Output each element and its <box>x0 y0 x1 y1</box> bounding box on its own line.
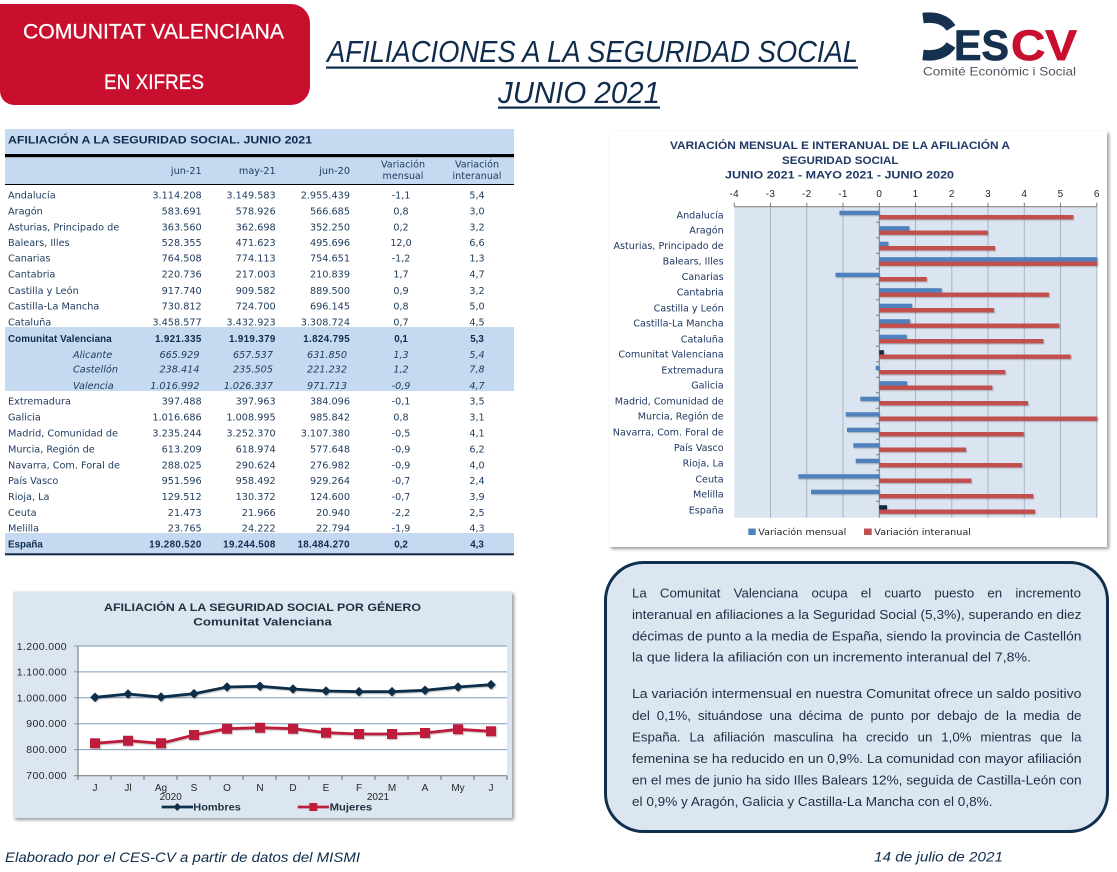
table column headers: interanual <box>453 171 501 182</box>
bar chart category labels: País Vasco <box>674 442 724 454</box>
row: Asturias: 363.560 <box>162 222 202 233</box>
panel: line chart by gender <box>13 592 512 818</box>
row: Murcia <box>8 444 485 456</box>
row: España: España <box>8 540 43 551</box>
paragraph 1: la que lidera la afiliación con un incremento interanual del 7,8%. <box>632 651 1031 665</box>
row: Canarias: 764.508 <box>162 254 202 265</box>
line chart y axis labels: 900.000 <box>26 718 67 730</box>
row: Aragón <box>8 205 485 217</box>
line chart legend: Mujeres <box>330 802 373 814</box>
row: Murcia: 613.209 <box>162 445 202 456</box>
row: Madrid: 4,1 <box>469 429 485 440</box>
bar chart top axis labels: 0 <box>876 189 882 200</box>
bar chart category labels: Extremadura <box>661 366 724 376</box>
row: Melilla: 23.765 <box>168 524 202 535</box>
bar chart category labels: Cantabria <box>677 288 724 298</box>
row: Cantabria: 4,7 <box>469 270 485 281</box>
bar chart category labels: Ceuta <box>695 474 724 486</box>
row: Cataluña: 0,7 <box>393 317 409 328</box>
bar chart top axis labels: -2 <box>802 189 812 200</box>
panel: data table <box>5 129 514 555</box>
row: Valencia: -0,9 <box>392 381 410 392</box>
row: Castellón: Castellón <box>73 364 118 376</box>
row: Alicante: 665.929 <box>159 350 200 361</box>
row: Castellón: 221.232 <box>307 365 347 376</box>
bar chart category labels: Asturias, Principado de <box>613 241 724 252</box>
row: Asturias: 362.698 <box>236 222 276 233</box>
paragraph 2 <box>632 687 1082 809</box>
row: Alicante: Alicante <box>72 350 112 361</box>
line chart title: AFILIACIÓN A LA SEGURIDAD SOCIAL POR GÉNERO <box>104 601 421 614</box>
footer: date: 14 de julio de 2021 <box>874 848 1003 864</box>
row: Alicante: 1,3 <box>393 350 409 361</box>
row: Murcia: 577.648 <box>310 445 350 456</box>
row: País Vasco: País Vasco <box>8 475 58 487</box>
logo: CESCV: ES <box>954 22 1009 70</box>
line chart x axis labels: Ag <box>155 783 167 794</box>
line chart x axis labels: S <box>191 783 198 794</box>
row: Aragón: 566.685 <box>310 206 350 217</box>
row: Rioja: 124.600 <box>310 492 350 503</box>
row: Castellón <box>73 364 485 376</box>
row: Melilla: -1,9 <box>392 524 410 535</box>
row: Rioja <box>8 492 485 503</box>
row: Asturias <box>8 222 485 233</box>
row: Asturias: 3,2 <box>469 222 485 233</box>
row: Comunitat Valenciana: Comunitat Valenciana <box>8 334 112 345</box>
table column headers: Variación <box>381 158 425 170</box>
row: País Vasco: 2,4 <box>469 476 485 487</box>
line chart x axis labels: J <box>488 783 494 794</box>
row: Castilla y León: 889.500 <box>310 286 350 297</box>
bar chart top axis labels: -4 <box>730 189 739 200</box>
table column headers: mensual <box>383 171 423 182</box>
row: Cantabria: 217.003 <box>236 270 276 281</box>
row: País Vasco: 929.264 <box>310 476 350 487</box>
row: Castilla-La Mancha <box>8 302 485 312</box>
row: Canarias: 774.113 <box>236 254 276 265</box>
line chart y axis labels: 800.000 <box>26 744 67 756</box>
row: Murcia: -0,9 <box>392 445 410 456</box>
row: Madrid: 3.252.370 <box>226 429 276 440</box>
title: JUNIO 2021 <box>497 75 660 110</box>
row: Andalucía: 5,4 <box>469 191 485 202</box>
row: Valencia: Valencia <box>73 381 114 392</box>
row: Alicante: 631.850 <box>307 350 347 361</box>
row: Andalucía: 3.114.208 <box>152 191 202 202</box>
row: País Vasco: -0,7 <box>392 476 410 487</box>
row: Ceuta: 21.966 <box>242 508 276 519</box>
row: Castilla-La Mancha: 730.812 <box>162 302 202 312</box>
row: Rioja: 129.512 <box>162 492 202 503</box>
row: Extremadura <box>8 397 485 408</box>
line chart x axis labels: F <box>356 783 362 794</box>
row: Melilla: Melilla <box>8 524 39 535</box>
line chart y axis labels: 700.000 <box>26 770 67 782</box>
row: Canarias <box>8 254 485 265</box>
row: Comunitat Valenciana: 1.921.335 <box>155 334 202 345</box>
paragraph 2: La variación intermensual en nuestra Comunitat ofrece un saldo positivo <box>632 687 1082 701</box>
bar chart category labels: España <box>689 506 724 516</box>
bar chart category labels: Madrid, Comunidad de <box>615 396 724 408</box>
bar chart category labels: Castilla y León <box>654 302 724 314</box>
row: Valencia <box>73 381 486 392</box>
bar chart legend: Variación mensual <box>758 527 846 538</box>
paragraph 2: España. La afiliación masculina ha crecido un 1,0% mientras que la <box>632 731 1082 745</box>
row: Ceuta: 21.473 <box>168 508 202 519</box>
line chart x axis labels: J <box>92 783 98 794</box>
row: País Vasco: 951.596 <box>162 476 202 487</box>
row: Castilla-La Mancha: 724.700 <box>236 302 276 312</box>
series: variación interanual bars <box>879 215 1097 514</box>
header badge: Comunitat Valenciana en xifres: COMUNITAT VALENCIANA <box>23 20 284 44</box>
line chart x axis labels: My <box>451 783 465 794</box>
row: Navarra: Navarra, Com. Foral de <box>8 461 120 472</box>
row: Rioja: 130.372 <box>236 492 276 503</box>
bar chart top axis labels: -3 <box>766 189 775 200</box>
bar chart category labels: Galicia <box>691 380 724 392</box>
row: Castilla-La Mancha: 5,0 <box>469 302 485 312</box>
line chart x axis labels: M <box>388 783 396 794</box>
bar chart title: VARIACIÓN MENSUAL E INTERANUAL DE LA AFILIACIÓN A <box>670 139 1010 152</box>
row: Extremadura: 397.963 <box>236 397 276 408</box>
line chart y axis labels: 1.000.000 <box>17 693 67 705</box>
bar chart title: SEGURIDAD SOCIAL <box>782 155 899 167</box>
row: Galicia: 3,1 <box>469 413 485 424</box>
row: Extremadura: -0,1 <box>392 397 410 408</box>
row: Galicia: 1.016.686 <box>152 413 202 424</box>
row: Rioja: 3,9 <box>469 492 485 503</box>
row: Navarra: -0,9 <box>392 461 410 472</box>
row: Alicante <box>72 350 485 361</box>
row: Balears: Balears, Illes <box>8 238 70 249</box>
paragraph 1: décimas de punto a la media de España, siendo la provincia de Castellón <box>632 630 1082 644</box>
row: Galicia: Galicia <box>8 413 41 424</box>
bar chart category labels: Navarra, Com. Foral de <box>613 428 724 438</box>
row: Canarias: 754.651 <box>310 254 350 265</box>
row: Murcia: 618.974 <box>236 445 276 456</box>
line chart title <box>104 601 421 628</box>
row: Castilla-La Mancha: 0,8 <box>393 302 409 312</box>
row: Madrid: 3.107.380 <box>301 429 350 440</box>
row: Comunitat Valenciana: 5,3 <box>470 334 484 345</box>
row: Galicia <box>8 413 485 424</box>
footer: source: Elaborado por el CES-CV a partir de datos del MISMI <box>5 849 360 865</box>
row: Alicante: 657.537 <box>233 350 274 361</box>
row: Cataluña: 3.308.724 <box>301 317 350 328</box>
row: Castilla-La Mancha: 696.145 <box>310 302 350 312</box>
row: Madrid <box>8 429 485 440</box>
row: Canarias: -1,2 <box>392 254 410 265</box>
bar chart top axis labels: 5 <box>1058 189 1064 200</box>
line chart title: Comunitat Valenciana <box>193 616 333 628</box>
row: Extremadura: 3,5 <box>469 397 485 408</box>
row: Galicia: 985.842 <box>310 413 350 424</box>
line chart legend: Hombres <box>193 802 241 814</box>
row: Ceuta: Ceuta <box>8 508 37 519</box>
row: País Vasco: 958.492 <box>236 476 276 487</box>
paragraph 1: interanual en afiliaciones a la Seguridad Social (5,3%), superando en diez <box>632 608 1082 622</box>
row: Galicia: 1.008.995 <box>226 413 276 424</box>
bar chart top axis labels: 6 <box>1094 189 1100 200</box>
line chart x axis labels: 2021 <box>367 792 390 803</box>
row: Melilla: 22.794 <box>316 524 350 535</box>
bar chart top axis labels: 3 <box>985 189 991 200</box>
paragraph 1: La Comunitat Valenciana ocupa el cuarto puesto en incremento <box>632 586 1081 600</box>
row: Cataluña: 3.432.923 <box>226 317 276 328</box>
row: Valencia: 1.026.337 <box>224 381 274 392</box>
bar chart category labels <box>613 210 724 516</box>
row: Aragón: 0,8 <box>393 206 409 217</box>
row: Melilla: 24.222 <box>242 524 276 535</box>
row: Madrid: 3.235.244 <box>152 429 202 440</box>
table column headers: may-21 <box>239 166 276 177</box>
row: Ceuta: 2,5 <box>469 508 485 519</box>
row: Castellón: 7,8 <box>469 365 485 376</box>
row: Navarra: 276.982 <box>310 461 350 472</box>
row: Extremadura: 384.096 <box>310 397 350 408</box>
row: Aragón: 3,0 <box>469 206 485 217</box>
series: Mujeres line <box>90 723 496 748</box>
row: Cataluña: 4,5 <box>469 317 485 328</box>
line chart x axis labels: A <box>422 783 429 794</box>
header badge: Comunitat Valenciana en xifres: EN XIFRES <box>104 71 204 94</box>
bar chart category labels: Aragón <box>689 224 724 236</box>
row: Valencia: 971.713 <box>307 381 347 392</box>
line chart x axis labels <box>92 783 494 803</box>
row: Navarra: 4,0 <box>469 461 485 472</box>
row: Cataluña: Cataluña <box>8 317 51 328</box>
row: Melilla: 4,3 <box>469 524 485 535</box>
bar chart category labels: Balears, Illes <box>663 256 724 268</box>
line chart x axis labels: Jl <box>124 783 132 794</box>
bar chart title: JUNIO 2021 - MAYO 2021 - JUNIO 2020 <box>725 169 954 181</box>
row: Comunitat Valenciana <box>8 334 484 345</box>
row: Murcia: Murcia, Región de <box>8 444 95 456</box>
row: Balears: 471.623 <box>236 238 276 249</box>
row: Aragón: 583.691 <box>162 206 202 217</box>
row: Navarra: 288.025 <box>162 461 202 472</box>
line chart x axis labels: D <box>289 783 297 794</box>
bar chart top axis labels: 2 <box>949 189 955 200</box>
row: España: 0,2 <box>394 540 408 551</box>
row: Andalucía <box>8 190 485 202</box>
row: Castilla y León: 3,2 <box>469 286 485 297</box>
paragraph 2: el 0,9% y Aragón, Galicia y Castilla-La Mancha con el 0,8%. <box>632 795 992 809</box>
table column headers: Variación <box>455 158 499 170</box>
line chart x axis labels: E <box>323 783 330 794</box>
row: Melilla <box>8 524 485 535</box>
row: Cataluña <box>8 317 485 328</box>
table title: AFILIACIÓN A LA SEGURIDAD SOCIAL. JUNIO 2021 <box>8 134 312 146</box>
line chart x axis labels: 2020 <box>160 792 182 803</box>
bar chart top axis labels: 4 <box>1021 189 1027 200</box>
bar chart category labels: Castilla-La Mancha <box>633 318 724 330</box>
line chart x axis labels: N <box>256 783 264 794</box>
bar chart category labels: Rioja, La <box>683 458 724 470</box>
title: AFILIACIONES A LA SEGURIDAD SOCIAL <box>325 34 858 69</box>
row: Alicante: 5,4 <box>469 350 485 361</box>
row: Aragón: 578.926 <box>236 206 276 217</box>
paragraph 2: del 0,1%, situándose una décima de punto por debajo de la media de <box>632 709 1082 723</box>
row: País Vasco <box>8 475 485 487</box>
logo: CESCV: CV <box>1011 22 1077 70</box>
row: Valencia: 1.016.992 <box>150 381 200 392</box>
row: Madrid: Madrid, Comunidad de <box>8 429 118 440</box>
series: variación mensual bars <box>798 211 1097 510</box>
table column headers <box>170 158 501 182</box>
row: Ceuta: -2,2 <box>392 508 410 519</box>
row: Extremadura: Extremadura <box>8 397 71 408</box>
row: Andalucía: 2.955.439 <box>301 191 350 202</box>
row: Castellón: 238.414 <box>159 365 200 376</box>
line chart y axis labels <box>17 641 67 782</box>
row: Ceuta <box>8 508 485 519</box>
table column headers: jun-21 <box>170 166 202 177</box>
title <box>325 34 858 110</box>
row: Murcia: 6,2 <box>469 445 485 456</box>
paragraph 2: en el mes de junio ha sido Illes Balears 12%, seguida de Castilla-León con <box>632 774 1082 788</box>
row: España: 19.244.508 <box>223 540 276 551</box>
bar chart category labels: Cataluña <box>681 334 724 346</box>
bar chart category labels: Melilla <box>693 490 724 500</box>
row: Comunitat Valenciana: 1.919.379 <box>229 334 276 345</box>
logo: CESCV <box>923 18 1077 78</box>
bar chart title <box>670 139 1010 181</box>
line chart legend <box>162 802 373 814</box>
row: Galicia: 0,8 <box>393 413 409 424</box>
row: Balears: 6,6 <box>469 238 485 249</box>
table column headers: jun-20 <box>318 166 350 177</box>
line chart x axis labels: O <box>223 783 231 794</box>
row: España: 18.484.270 <box>297 540 350 551</box>
bar chart category labels: Andalucía <box>677 210 724 222</box>
row: Asturias: 0,2 <box>393 222 409 233</box>
row: Comunitat Valenciana: 0,1 <box>394 334 408 345</box>
row: España <box>8 540 484 551</box>
row: Balears <box>8 238 485 249</box>
row: Comunitat Valenciana: 1.824.795 <box>303 334 350 345</box>
row: Cantabria: 210.839 <box>310 270 350 281</box>
row: Asturias: Asturias, Principado de <box>8 222 119 233</box>
row: Cantabria: Cantabria <box>8 270 55 281</box>
row: Asturias: 352.250 <box>310 222 350 233</box>
row: España: 4,3 <box>470 540 484 551</box>
line chart y axis labels: 1.200.000 <box>17 641 67 653</box>
row: Canarias: 1,3 <box>469 254 485 265</box>
header badge: Comunitat Valenciana en xifres <box>0 4 310 105</box>
row: Castellón: 1,2 <box>393 365 409 376</box>
panel: bar chart monthly and annual variation <box>609 131 1107 547</box>
row: Castilla y León: 0,9 <box>393 286 409 297</box>
bar chart category labels: Canarias <box>682 272 724 283</box>
row: Rioja: -0,7 <box>392 492 410 503</box>
row: Navarra <box>8 461 485 472</box>
row: Navarra: 290.624 <box>236 461 276 472</box>
row: Cataluña: 3.458.577 <box>152 317 202 328</box>
bar chart legend <box>748 527 971 538</box>
line chart y axis labels: 1.100.000 <box>17 667 67 679</box>
row: Castellón: 235.505 <box>233 365 273 376</box>
paragraph 1 <box>632 586 1082 665</box>
logo: CESCV: Comité Econòmic i Social <box>923 64 1076 78</box>
row: Cantabria: 220.736 <box>162 270 202 281</box>
row: Castilla y León: Castilla y León <box>8 285 79 297</box>
panel: commentary text <box>606 562 1108 832</box>
row: Cantabria: 1,7 <box>393 270 409 281</box>
bar chart legend: Variación interanual <box>874 527 971 538</box>
row: Castilla y León: 909.582 <box>236 286 276 297</box>
bar chart top axis labels <box>730 189 1100 200</box>
row: Madrid: -0,5 <box>392 429 410 440</box>
row: Castilla y León: 917.740 <box>162 286 202 297</box>
row: España: 19.280.520 <box>149 540 202 551</box>
row: Aragón: Aragón <box>8 205 43 217</box>
bar chart top axis labels: -1 <box>838 189 848 200</box>
row: Balears: 495.696 <box>310 238 350 249</box>
row: Extremadura: 397.488 <box>162 397 202 408</box>
series: Hombres line <box>90 680 496 702</box>
bar chart category labels: Comunitat Valenciana <box>618 350 724 360</box>
bar chart category labels: Murcia, Región de <box>638 410 724 422</box>
row: Balears: 528.355 <box>162 238 202 249</box>
row: Andalucía: -1,1 <box>392 191 410 202</box>
row: Balears: 12,0 <box>390 238 412 249</box>
row: Castilla y León <box>8 285 485 297</box>
row: Andalucía: 3.149.583 <box>226 191 276 202</box>
row: Cantabria <box>8 270 485 281</box>
row: Castilla-La Mancha: Castilla-La Mancha <box>8 302 99 312</box>
paragraph 2: femenina se ha reducido en un 0,9%. La comunidad con mayor afiliación <box>632 752 1082 766</box>
row: Valencia: 4,7 <box>469 381 486 392</box>
row: Canarias: Canarias <box>8 254 50 265</box>
bar chart top axis labels: 1 <box>913 189 919 200</box>
row: Ceuta: 20.940 <box>316 508 350 519</box>
row: Rioja: Rioja, La <box>8 492 50 503</box>
row: Andalucía: Andalucía <box>8 190 56 202</box>
